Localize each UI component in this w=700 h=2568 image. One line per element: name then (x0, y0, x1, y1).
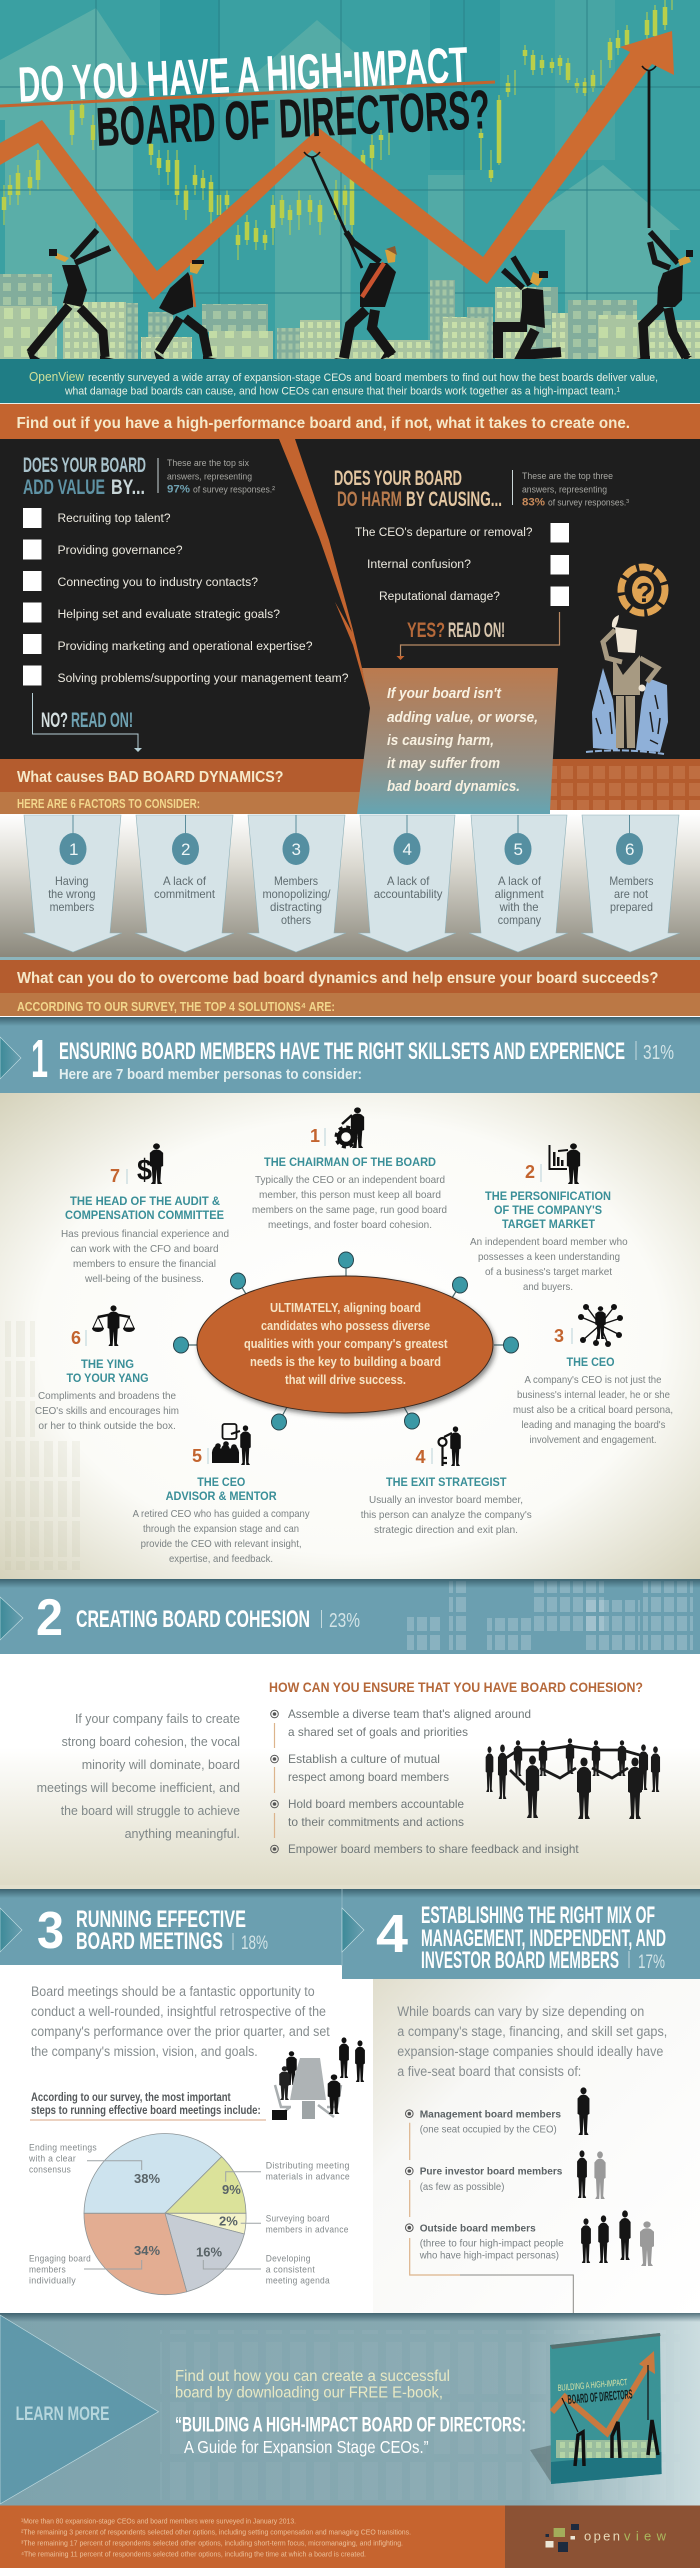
cohesion bullet list: Establish a culture of mutual (288, 1752, 440, 1766)
pie labels: Surveying board (266, 2214, 330, 2225)
add value heading: BY... (111, 476, 145, 499)
factor 1: Having (55, 874, 88, 888)
background arrows (0, 0, 680, 360)
callout: bad board dynamics box: is causing harm, (387, 732, 494, 749)
panel: hero illustration (0, 0, 700, 361)
persona 7 audit and compensation: THE HEAD OF THE AUDIT & (70, 1194, 220, 1208)
cohesion bullet list: a shared set of goals and priorities (288, 1725, 468, 1739)
no read on (32, 693, 142, 752)
e-book cover (530, 2333, 662, 2484)
cohesion bullet list: Empower board members to share feedback and insight (288, 1842, 579, 1856)
panel: board cohesion (0, 1654, 700, 1888)
icon: puzzled man with question mark (586, 567, 668, 754)
e-book call to action: A Guide for Expansion Stage CEOs.” (184, 2437, 429, 2457)
factor 6 (581, 815, 680, 952)
do harm heading: BY CAUSING... (406, 488, 502, 511)
figure 3 (334, 232, 397, 360)
factor 3: Members (274, 874, 318, 888)
factor 5: 5 (514, 840, 523, 859)
persona 1 chairman: meetings, and foster board cohesion. (268, 1219, 432, 1231)
panel: solution 2 header (0, 1579, 700, 1654)
factor 2 (135, 815, 234, 952)
persona 2 target market: possesses a keen understanding (478, 1251, 620, 1263)
logo: openview: open (584, 2529, 620, 2544)
figure 1 (27, 230, 114, 360)
e-book call to action (175, 2368, 526, 2457)
pie labels: with a clear (28, 2154, 76, 2165)
factor 5: company (498, 913, 541, 927)
factor 2: 2 (181, 840, 190, 859)
pie chart (84, 2134, 261, 2295)
persona 2 target market: TARGET MARKET (502, 1217, 596, 1231)
callout: bad board dynamics box: it may suffer from (387, 755, 500, 772)
persona 4 exit strategist: this person can analyze the company's (361, 1509, 532, 1521)
footnotes: ⁴The remaining 11 percent of respondents selected other options, including the time at which a board is created. (21, 2549, 366, 2558)
panel: intro band (0, 359, 700, 403)
city buildings (0, 274, 700, 359)
pie labels: individually (29, 2276, 76, 2287)
panel: find out heading bar (0, 403, 700, 439)
pie values: 38% (134, 2171, 160, 2186)
chart heading: steps to running effective board meetings include: (31, 2105, 261, 2117)
seat list: (one seat occupied by the CEO) (420, 2125, 557, 2136)
persona 7 audit and compensation: well-being of the business. (84, 1273, 204, 1285)
yes read on (396, 612, 560, 660)
persona 2 target market: THE PERSONIFICATION (485, 1189, 611, 1203)
panel: overcome heading bars: ACCORDING TO OUR SURVEY, THE TOP 4 SOLUTIONS⁴ ARE: (17, 999, 335, 1014)
factor 5 (469, 815, 568, 952)
persona 7 audit and compensation: members to ensure the financial (73, 1258, 216, 1270)
left paragraph: minority will dominate, board (82, 1757, 240, 1772)
figure 5 (636, 232, 693, 361)
left paragraph (37, 1711, 240, 1841)
central ellipse: candidates who possess diverse (261, 1318, 430, 1333)
pie labels: a consistent (266, 2265, 315, 2276)
central ellipse: needs is the key to building a board (250, 1354, 441, 1369)
persona 1 chairman: Typically the CEO or an independent board (255, 1174, 445, 1186)
solution 4 intro text: a company's stage, financing, and skill set gaps, (397, 2024, 667, 2039)
panel: solution 1 header (0, 1017, 700, 1093)
left paragraph: the board will struggle to achieve (61, 1803, 240, 1818)
left paragraph: If your company fails to create (75, 1711, 240, 1726)
solution 3 header: RUNNING EFFECTIVE (76, 1906, 246, 1933)
factor 4 (358, 815, 456, 952)
panel: bad board dynamics headers (0, 759, 700, 814)
solution 4 header: 17% (638, 1952, 665, 1973)
solution 3 intro text (31, 1984, 330, 2059)
do harm heading: answers, representing (522, 484, 607, 496)
do harm checklist: Reputational damage? (379, 591, 500, 603)
persona 3 the ceo: A company's CEO is not just the (524, 1374, 662, 1386)
factor 6: are not (614, 887, 649, 901)
title (0, 37, 495, 158)
persona 7 audit and compensation: can work with the CFO and board (70, 1243, 219, 1255)
factor 3 (247, 815, 346, 952)
central ellipse: qualities with your company's greatest (244, 1336, 448, 1351)
panel: seven personas (0, 1093, 700, 1580)
factor 1: the wrong (48, 887, 96, 901)
persona 2 target market: and buyers. (523, 1281, 573, 1293)
factor 2: A lack of (163, 874, 207, 888)
solution 3 intro text: Board meetings should be a fantastic opportunity to (31, 1984, 315, 1999)
central ellipse: ULTIMATELY, aligning board (270, 1300, 421, 1315)
persona 6 ying to your yang: 6 (71, 1328, 81, 1348)
persona 1 chairman (252, 1107, 447, 1231)
persona 6 ying to your yang: Compliments and broadens the (38, 1390, 176, 1402)
persona 3 the ceo: 3 (554, 1326, 564, 1346)
pie labels: members in advance (266, 2225, 349, 2236)
factor 5: alignment (495, 887, 544, 901)
callout: bad board dynamics box (357, 668, 558, 814)
icon: investor members (577, 2150, 606, 2199)
orange divider (279, 439, 372, 712)
persona 1 chairman: 1 (310, 1126, 320, 1146)
add value heading: 97% (167, 484, 190, 496)
left paragraph: meetings will become inefficient, and (37, 1780, 240, 1795)
add value heading: ADD VALUE (23, 476, 105, 499)
persona 5 ceo advisor and mentor: THE CEO (197, 1475, 245, 1489)
solution 4 intro text: While boards can vary by size depending on (397, 2004, 644, 2019)
cohesion bullet list: Assemble a diverse team that's aligned around (288, 1707, 531, 1721)
do harm heading: DO HARM (337, 488, 402, 511)
persona 4 exit strategist: Usually an investor board member, (369, 1494, 523, 1506)
add value checklist: Providing governance? (58, 545, 182, 557)
factor 4: A lack of (387, 874, 430, 888)
no read on: NO? (41, 709, 68, 732)
central ellipse (174, 1252, 518, 1430)
e-book call to action: Find out how you can create a successful (175, 2368, 450, 2385)
factor 6: Members (609, 874, 653, 888)
pie labels: meeting agenda (266, 2276, 330, 2287)
do harm heading: of survey responses.³ (548, 498, 629, 508)
icon: puzzled man with question mark: ? (636, 577, 653, 608)
persona 4 exit strategist: THE EXIT STRATEGIST (386, 1475, 507, 1489)
solution 4 header (342, 1889, 700, 1979)
solution 4 intro text: a five-seat board that consists of: (397, 2064, 581, 2079)
hooks and poles (304, 66, 656, 268)
persona 6 ying to your yang (35, 1305, 179, 1432)
do harm heading (334, 467, 629, 511)
persona 6 ying to your yang: THE YING (81, 1357, 134, 1371)
figure 2 (154, 260, 217, 360)
seat list: who have high-impact personas) (419, 2251, 559, 2262)
icon: outside members (581, 2210, 654, 2266)
persona 7 audit and compensation: COMPENSATION COMMITTEE (65, 1208, 224, 1222)
seat list: Management board members (420, 2108, 561, 2120)
factor 1: members (50, 900, 94, 914)
intro text: OpenView (29, 369, 85, 384)
persona 1 chairman: members on the same page, run good board (252, 1204, 447, 1216)
factor 3: 3 (292, 840, 301, 859)
panel: overcome heading bars: What can you do to overcome bad board dynamics and help ensure your board succeeds? (17, 970, 658, 987)
icon: boardroom meeting (272, 2037, 365, 2120)
panel: solution 2 header: 23% (329, 1610, 360, 1632)
add value checklist: Solving problems/supporting your management team? (58, 673, 348, 685)
solution 3 header: 3 (37, 1902, 64, 1960)
persona 6 ying to your yang: or her to think outside the box. (38, 1420, 176, 1432)
persona 5 ceo advisor and mentor: 5 (192, 1446, 202, 1466)
intro text (29, 369, 658, 398)
solution 3 header: 18% (241, 1933, 268, 1954)
pie labels: consensus (29, 2165, 71, 2176)
chart heading (30, 2092, 266, 2120)
logo: openview: view (624, 2529, 667, 2544)
persona 3 the ceo: must also be a critical board persona, (513, 1404, 673, 1416)
persona 1 chairman: member, this person must keep all board (259, 1189, 441, 1201)
seat list: (as few as possible) (420, 2182, 504, 2193)
panel: board self-check (0, 439, 700, 759)
yes read on: READ ON! (448, 619, 505, 642)
callout: bad board dynamics box: bad board dynamics. (387, 778, 520, 795)
left paragraph: anything meaningful. (125, 1826, 240, 1841)
do harm heading: These are the top three (522, 471, 613, 482)
persona 4 exit strategist (361, 1426, 532, 1536)
do harm checklist: The CEO's departure or removal? (355, 527, 532, 539)
pie values: 2% (219, 2214, 238, 2229)
e-book call to action: board by downloading our FREE E-book, (175, 2385, 443, 2402)
callout: bad board dynamics box: If your board isn't (387, 685, 502, 702)
factor 1: 1 (69, 840, 78, 859)
solution 4 intro text (397, 2004, 667, 2079)
do harm heading: DOES YOUR BOARD (334, 467, 462, 490)
persona 7 audit and compensation: Has previous financial experience and (61, 1228, 229, 1240)
seat list: Outside board members (420, 2223, 536, 2235)
factor 6: prepared (610, 900, 653, 914)
intro text: what damage bad boards can cause, and how CEOs can ensure that their boards work together as a high-impact team.¹ (64, 386, 620, 398)
footnotes: ¹More than 80 expansion-stage CEOs and board members were surveyed in January 2013. (21, 2516, 296, 2525)
panel: solution 1 header: 1 (31, 1029, 48, 1089)
central ellipse: that will drive success. (285, 1372, 406, 1387)
cohesion bullet list: respect among board members (288, 1770, 449, 1784)
icon: circle of people (486, 1738, 660, 1819)
pie values: 9% (222, 2182, 241, 2197)
persona 4 exit strategist: strategic direction and exit plan. (374, 1524, 518, 1536)
callout: bad board dynamics box: adding value, or worse, (387, 709, 538, 726)
add value checklist: Helping set and evaluate strategic goals? (58, 609, 280, 621)
e-book call to action: “BUILDING A HIGH-IMPACT BOARD OF DIRECTORS: (175, 2414, 526, 2437)
solution 3 intro text: company's performance over the prior quarter, and set (31, 2024, 330, 2039)
panel: solution 1 header: Here are 7 board member personas to consider: (59, 1066, 362, 1083)
persona 5 ceo advisor and mentor: ADVISOR & MENTOR (166, 1489, 277, 1503)
pie labels: Distributing meeting (266, 2161, 350, 2172)
chart heading: According to our survey, the most important (31, 2092, 231, 2104)
no read on: READ ON! (71, 709, 133, 732)
learn more triangle: LEARN MORE (16, 2404, 109, 2425)
cohesion question heading: HOW CAN YOU ENSURE THAT YOU HAVE BOARD COHESION? (269, 1679, 643, 1695)
yes read on: YES? (407, 619, 445, 642)
persona 6 ying to your yang: TO YOUR YANG (66, 1371, 148, 1385)
persona 2 target market (470, 1143, 628, 1293)
persona 5 ceo advisor and mentor: expertise, and feedback. (169, 1553, 273, 1565)
persona 2 target market: An independent board member who (470, 1236, 628, 1248)
persona 7 audit and compensation (61, 1143, 229, 1285)
pie labels: Engaging board (29, 2254, 91, 2265)
seat list: Pure investor board members (420, 2166, 563, 2178)
footnotes (21, 2516, 411, 2558)
seat list (406, 2108, 573, 2313)
persona 1 chairman: THE CHAIRMAN OF THE BOARD (264, 1155, 436, 1169)
panel: bad board dynamics headers: HERE ARE 6 FACTORS TO CONSIDER: (17, 796, 200, 811)
chart arrow (0, 31, 674, 300)
panel: bad board dynamics headers: What causes BAD BOARD DYNAMICS? (17, 769, 284, 786)
learn more triangle (0, 2315, 158, 2504)
pie labels: members (29, 2265, 66, 2276)
pie labels: Ending meetings (29, 2143, 97, 2154)
persona 3 the ceo: involvement and engagement. (530, 1434, 656, 1446)
footnotes: ²The remaining 3 percent of respondents selected other options, including setting compensation and managing CEO transitions. (21, 2527, 411, 2536)
panel: solution 4 (0, 1885, 700, 2313)
solution 3 intro text: conduct a well-rounded, insightful retrospective of the (31, 2004, 326, 2019)
factor 4: 4 (402, 840, 412, 859)
intro text: recently surveyed a wide array of expansion-stage CEOs and board members to find out how the best boards deliver value, (88, 372, 658, 384)
persona 5 ceo advisor and mentor: through the expansion stage and can (143, 1523, 299, 1535)
panel: solution 3 (0, 1889, 373, 2313)
pie values (134, 2171, 241, 2260)
panel: find out heading bar: Find out if you have a high-performance board and, if not, what it takes to create one. (16, 415, 630, 432)
panel: solution 2 header: 2 (36, 1589, 63, 1647)
icon: management member (578, 2087, 589, 2135)
pie labels (28, 2143, 350, 2287)
cohesion bullet list (271, 1707, 579, 1856)
solution 3 header: BOARD MEETINGS (76, 1928, 223, 1955)
factor 6: 6 (625, 840, 634, 859)
logo: openview (546, 2524, 667, 2552)
persona 5 ceo advisor and mentor: provide the CEO with relevant insight, (141, 1538, 302, 1550)
e-book cover: BUILDING A HIGH-IMPACT (557, 2377, 628, 2393)
factor 5: A lack of (498, 874, 542, 888)
add value checklist: Recruiting top talent? (58, 513, 170, 525)
factor 3: monopolizing/ (262, 887, 331, 901)
solution 3 intro text: the company's mission, vision, and goals. (31, 2044, 258, 2059)
factor 3: others (281, 913, 311, 927)
footnotes: ³The remaining 17 percent of respondents selected other options, including short-term focus, micromanaging, and infighting. (21, 2538, 403, 2547)
persona 2 target market: 2 (525, 1162, 535, 1182)
candlesticks (4, 0, 672, 260)
solution 3 header (0, 1889, 373, 1978)
persona 4 exit strategist: 4 (416, 1447, 426, 1467)
pie labels: Developing (266, 2254, 311, 2265)
persona 7 audit and compensation: 7 (110, 1166, 120, 1186)
persona 6 ying to your yang: CEO's skills and encourages him (35, 1405, 179, 1417)
cohesion bullet list: to their commitments and actions (288, 1815, 464, 1829)
persona 3 the ceo (513, 1304, 673, 1446)
grid lines (0, 0, 700, 360)
pie values: 16% (196, 2245, 222, 2260)
pie labels: materials in advance (266, 2172, 350, 2183)
seat list: (three to four high-impact people (420, 2239, 564, 2250)
factor 4: accountability (374, 887, 442, 901)
do harm checklist (355, 523, 569, 606)
factor 2: commitment (154, 887, 216, 901)
panel: solution 2 header: CREATING BOARD COHESION (76, 1606, 310, 1633)
add value heading: These are the top six (167, 458, 249, 469)
add value checklist: Connecting you to industry contacts? (58, 577, 258, 589)
persona 2 target market: OF THE COMPANY'S (494, 1203, 602, 1217)
persona 2 target market: of a business's target market (485, 1266, 612, 1278)
persona 5 ceo advisor and mentor (133, 1424, 310, 1565)
left paragraph: strong board cohesion, the vocal (62, 1734, 240, 1749)
panel: overcome heading bars (0, 960, 700, 1016)
add value heading: answers, representing (167, 472, 252, 482)
persona 5 ceo advisor and mentor: A retired CEO who has guided a company (133, 1508, 310, 1520)
factor 1 (23, 815, 122, 952)
add value heading: DOES YOUR BOARD (23, 454, 146, 477)
solution 4 intro text: expansion-stage companies should ideally have (397, 2044, 663, 2059)
add value heading (23, 454, 275, 499)
persona 7 audit and compensation: $ (137, 1154, 152, 1187)
panel: footer (0, 2506, 700, 2568)
solution 4 header: 4 (376, 1904, 408, 1964)
persona 3 the ceo: THE CEO (566, 1355, 614, 1369)
do harm checklist: Internal confusion? (367, 559, 471, 571)
figure 4 (498, 257, 561, 358)
factor 5: with the (499, 900, 539, 914)
add value heading: of survey responses.² (193, 484, 275, 496)
panel: solution 1 header: 31% (643, 1042, 674, 1064)
add value checklist (23, 508, 348, 686)
do harm heading: 83% (522, 496, 545, 508)
persona 3 the ceo: leading and managing the board's (521, 1419, 665, 1431)
cohesion bullet list: Hold board members accountable (288, 1797, 464, 1811)
panel: learn more (0, 2313, 700, 2506)
pie values: 34% (134, 2243, 160, 2258)
factor 3: distracting (270, 900, 322, 914)
add value checklist: Providing marketing and operational expertise? (58, 641, 312, 653)
panel: six factors (0, 814, 700, 960)
persona 3 the ceo: business's internal leader, he or she (517, 1389, 670, 1401)
